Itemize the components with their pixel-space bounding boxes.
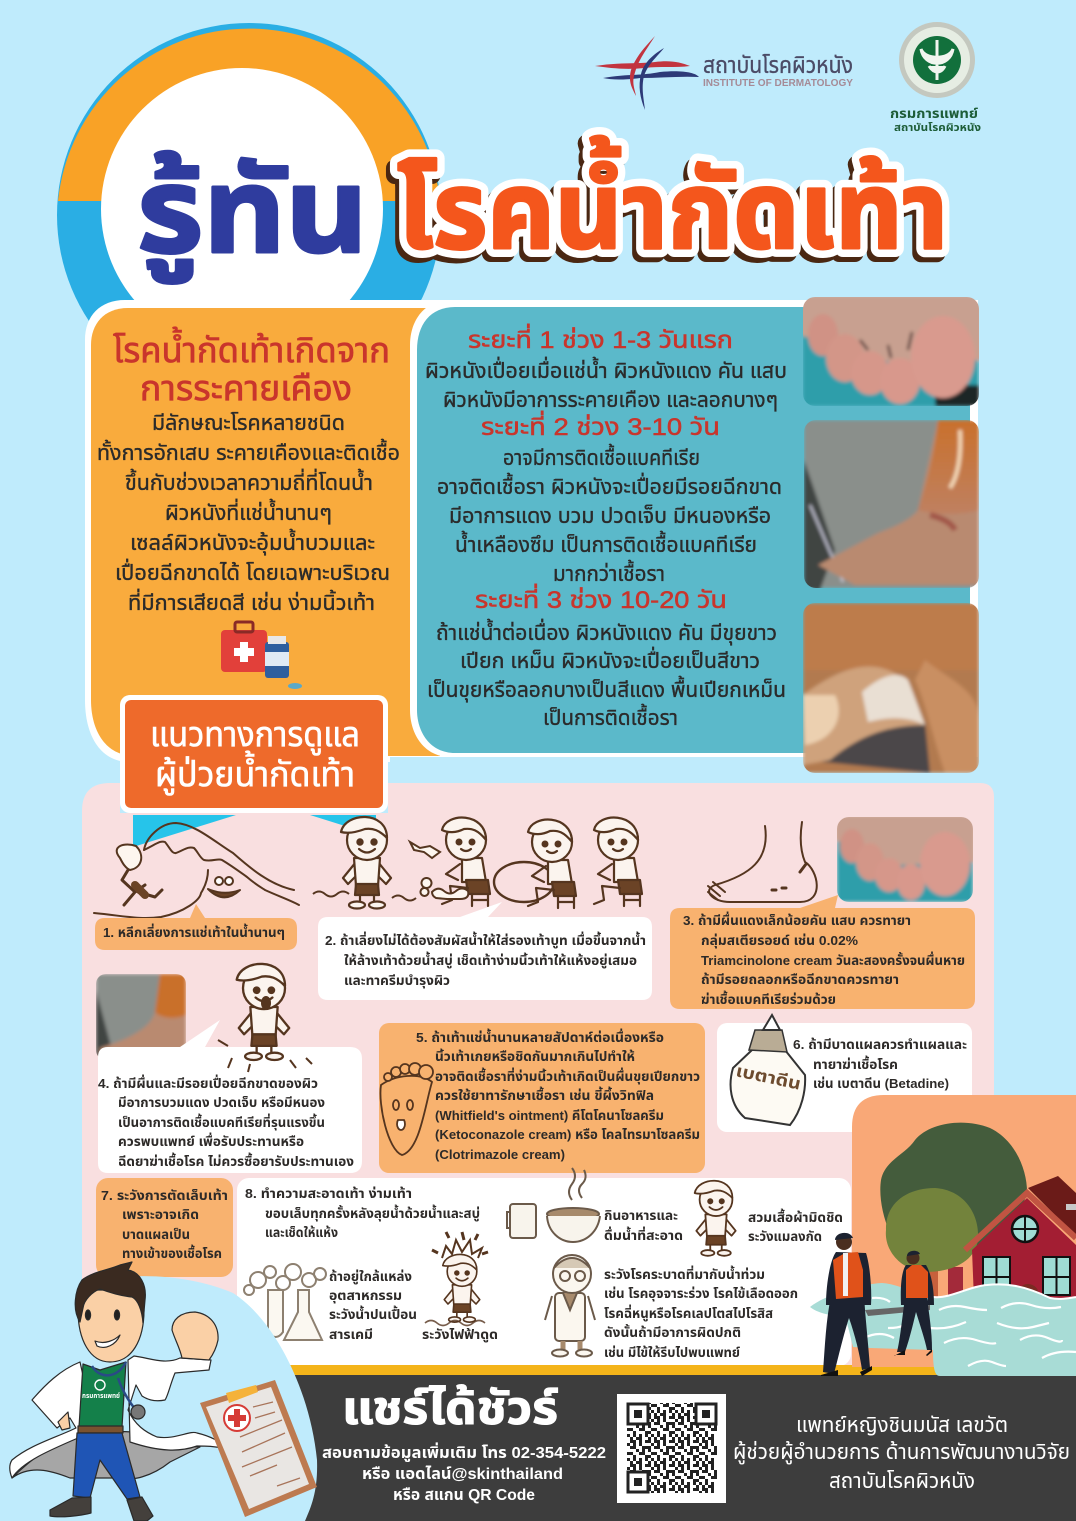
callout 8: 8. ทำความสะอาดเท้า ง่ามเท้า xyxy=(245,1186,412,1201)
icon: betadine bottle xyxy=(731,1015,805,1125)
causes body text: เปื่อยฉีกขาดได้ โดยเฉพาะบริเวณ xyxy=(115,558,390,585)
causes heading xyxy=(113,326,390,408)
callout 4: เป็นอาการติดเชื้อแบคทีเรียที่รุนแรงขึ้น xyxy=(118,1113,325,1130)
callout 4: มีอาการบวมแดง ปวดเจ็บ หรือมีหนอง xyxy=(118,1095,325,1110)
mascot shoes xyxy=(50,1497,153,1521)
stage 3 text: ถ้าแช่น้ำต่อเนื่อง ผิวหนังแดง คัน มีขุยขาว xyxy=(436,618,777,646)
footer credit text: สถาบันโรคผิวหนัง xyxy=(829,1470,975,1493)
callout 8: ขอบเล็บทุกครั้งหลังลุยน้ำด้วยน้ำและสบู่ xyxy=(265,1204,480,1222)
illustration: electric shock child xyxy=(425,1232,488,1326)
callout 3: ถ้ามีรอยถลอกหรือฉีกขาดควรทายา xyxy=(701,972,899,987)
stage 3 text: ระยะที่ 3 ช่วง 10-20 วัน xyxy=(475,583,727,614)
footer credit text: ผู้ช่วยผู้อำนวยการ ด้านการพัฒนางานวิจัย xyxy=(733,1440,1070,1465)
callout 8: ระวังน้ำปนเปื้อน xyxy=(329,1305,417,1322)
illustration: chemical flasks xyxy=(244,1264,326,1340)
callout 8: โรคฉี่หนูหรือโรคเลปโตสไปโรสิส xyxy=(604,1304,773,1322)
photo: infected foot xyxy=(96,974,186,1060)
illustration: glass and bowl xyxy=(507,1168,600,1242)
footer credit text xyxy=(733,1414,1070,1493)
causes heading: โรคน้ำกัดเท้าเกิดจาก xyxy=(113,326,390,370)
callout 3: 3. ถ้ามีผื่นแดงเล็กน้อยคัน แสบ ควรทายา xyxy=(683,911,911,928)
water ripples xyxy=(864,1298,1076,1366)
callout 5: 5. ถ้าเท้าแช่น้ำนานหลายสัปดาห์ต่อเนื่องหรือ xyxy=(416,1028,664,1045)
qr code xyxy=(617,1394,726,1503)
causes body text xyxy=(97,412,400,615)
causes body text: เซลล์ผิวหนังจะอุ้มน้ำบวมและ xyxy=(130,528,375,556)
photo: toes xyxy=(835,815,975,902)
stethoscope xyxy=(92,1362,135,1409)
callout 1 xyxy=(95,904,297,950)
button: care guidance xyxy=(120,695,388,813)
button: care guidance: แนวทางการดูแล xyxy=(150,715,360,755)
stage 3 text: เปียก เหม็น ผิวหนังจะเปื่อยเป็นสีขาว xyxy=(460,646,760,673)
callout 6: เช่น เบตาดีน (Betadine) xyxy=(813,1076,949,1091)
illustration: doctor figure xyxy=(545,1255,595,1356)
causes heading: การระคายเคือง xyxy=(140,369,352,408)
callout 8: เช่น มีไข้ให้รีบไปพบแพทย์ xyxy=(604,1345,740,1360)
footer contact text: หรือ สแกน QR Code xyxy=(393,1487,535,1504)
causes body text: มีลักษณะโรคหลายชนิด xyxy=(152,412,345,435)
causes body text: ขึ้นกับช่วงเวลาความถี่ที่โดนน้ำ xyxy=(125,468,373,495)
stage 1 text xyxy=(425,323,787,412)
callout 6: ทายาฆ่าเชื้อโรค xyxy=(813,1055,898,1072)
callout 8: ระวังแมลงกัด xyxy=(748,1229,822,1244)
illustration: doctor mascot xyxy=(10,1262,227,1521)
callout 8: และเช็ดให้แห้ง xyxy=(265,1225,338,1240)
illustration: crying child xyxy=(218,964,312,1072)
callout 7 xyxy=(96,1178,233,1277)
callout 5: นิ้วเท้าเกยหรือชิดกันมากเกินไปทำให้ xyxy=(435,1048,635,1064)
stage 2 text: น้ำเหลืองซึม เป็นการติดเชื้อแบคทีเรีย xyxy=(455,530,757,557)
callout 2: 2. ถ้าเลี่ยงไม่ได้ต้องสัมผัสน้ำให้ใส่รองเท้าบูท เมื่อขึ้นจากน้ำ xyxy=(325,931,646,949)
icon: betadine bottle: เบตาดีน xyxy=(734,1061,803,1094)
callout 7: บาดแผลเป็น xyxy=(122,1227,190,1242)
callout 2 xyxy=(318,902,652,1000)
callout 2: และทาครีมบำรุงผิว xyxy=(344,973,450,988)
callout 5: (Clotrimazole cream) xyxy=(435,1147,565,1162)
callout 1: 1. หลีกเลี่ยงการแช่เท้าในน้ำนานๆ xyxy=(103,923,285,940)
illustration: flood scene xyxy=(810,1095,1076,1376)
callout 7: ทางเข้าของเชื้อโรค xyxy=(122,1244,222,1261)
stage 2 text: ระยะที่ 2 ช่วง 3-10 วัน xyxy=(481,410,720,441)
footer heading: แชร์ได้ชัวร์ xyxy=(342,1382,559,1434)
callout 8: ระวังโรคระบาดที่มากับน้ำท่วม xyxy=(604,1265,765,1282)
stage 2 text: มีอาการแดง บวม ปวดเจ็บ มีหนองหรือ xyxy=(449,503,771,528)
rescuer 2 xyxy=(865,1251,934,1356)
callout 6 xyxy=(717,1015,972,1132)
callout 8: ดังนั้นถ้ามีอาการผิดปกติ xyxy=(604,1323,741,1340)
mascot coat right and sleeve xyxy=(128,1356,227,1450)
illustration: clipboard xyxy=(200,1380,317,1517)
footer contact text: หรือ แอดไลน์@skinthailand xyxy=(362,1466,563,1483)
mascot hand xyxy=(58,1412,70,1430)
logo: department of medical services xyxy=(890,22,981,134)
callout 8: อุตสาหกรรม xyxy=(329,1288,402,1303)
stage 2 text: อาจติดเชื้อรา ผิวหนังจะเปื่อยมีรอยฉีกขาด xyxy=(437,472,782,499)
stage 1 text: ผิวหนังเปื่อยเมื่อแช่น้ำ ผิวหนังแดง คัน แสบ xyxy=(425,356,787,383)
causes body text: ทั้งการอักเสบ ระคายเคืองและติดเชื้อ xyxy=(97,438,400,465)
callout 8: สวมเสื้อผ้ามิดชิด xyxy=(748,1208,843,1225)
title: โรคน้ำกัดเท้า: โรคน้ำกัดเท้า xyxy=(397,136,948,271)
footer contact text: สอบถามข้อมูลเพิ่มเติม โทร 02-354-5222 xyxy=(322,1442,606,1463)
stage 3 text: เป็นการติดเชื้อรา xyxy=(543,703,678,730)
mascot head xyxy=(78,1290,144,1362)
department name: กรมการแพทย์ xyxy=(890,106,978,121)
callout 4: 4. ถ้ามีผื่นและมีรอยเปื่อยฉีกขาดของผิว xyxy=(98,1074,318,1091)
mascot coat left xyxy=(10,1362,84,1478)
stage 1 text: ผิวหนังมีอาการระคายเคือง และลอกบางๆ xyxy=(443,389,778,412)
callout 8: ดื่มน้ำที่สะอาด xyxy=(604,1226,683,1243)
callout 4 xyxy=(98,1020,362,1173)
stage 1 text: ระยะที่ 1 ช่วง 1-3 วันแรก xyxy=(468,323,733,354)
mascot shirt xyxy=(79,1362,126,1427)
callout 5 xyxy=(379,1023,705,1173)
mascot belt xyxy=(78,1426,123,1433)
callout 5: ควรใช้ยาทารักษาเชื้อรา เช่น ขี้ผึ้งวิทฟิล xyxy=(435,1086,654,1103)
footer credit text: แพทย์หญิงชินมนัส เลขวัต xyxy=(796,1414,1008,1437)
boots xyxy=(410,842,440,896)
logo text Thai: สถาบันโรคผิวหนัง xyxy=(703,52,853,78)
title ring: orange and blue circle xyxy=(57,23,441,407)
callout 7: เพราะอาจเกิด xyxy=(122,1207,199,1222)
callout 5: อาจติดเชื้อราที่ง่ามนิ้วเท้าเกิดเป็นผื่นขุยเปียกขาว xyxy=(435,1067,700,1084)
callout 2: ให้ล้างเท้าด้วยน้ำสบู่ เช็ดเท้าง่ามนิ้วเท้าให้แห้งอยู่เสมอ xyxy=(344,951,637,969)
illustration: wave and running child xyxy=(94,815,376,918)
title: โรคน้ำกัดเท้า: โรคน้ำกัดเท้า xyxy=(397,136,948,271)
icon: first aid kit xyxy=(221,622,302,689)
callout 3 xyxy=(670,895,975,1009)
button: care guidance: ผู้ป่วยน้ำกัดเท้า xyxy=(155,750,355,795)
callout 7: 7. ระวังการตัดเล็บเท้า xyxy=(101,1188,228,1203)
footer band xyxy=(280,1365,1076,1521)
callout 8: ถ้าอยู่ใกล้แหล่ง xyxy=(329,1269,412,1285)
mascot fist xyxy=(172,1312,218,1360)
blue corner behind doctor xyxy=(0,1276,317,1521)
callout 4: ฉีดยาฆ่าเชื้อโรค ไม่ควรซื้อยารับประทานเอง xyxy=(118,1152,354,1169)
illustration: children washing feet xyxy=(313,817,642,908)
photo: foot stage 3 xyxy=(803,603,979,773)
callout 5: (Ketoconazole cream) หรือ โคลไทรมาโซลครีม xyxy=(435,1127,700,1142)
stage 2 text xyxy=(437,410,782,586)
stage 3 text xyxy=(427,583,786,730)
callout 8: กินอาหารและ xyxy=(604,1208,678,1223)
panel: causes xyxy=(85,300,500,762)
stage 2 text: อาจมีการติดเชื้อแบคทีเรีย xyxy=(503,443,700,470)
rescuer 1 xyxy=(821,1233,872,1376)
illustration: child with long sleeves xyxy=(695,1181,736,1256)
logo: institute of dermatology xyxy=(595,36,853,110)
callout 6: 6. ถ้ามีบาดแผลควรทำแผลและ xyxy=(793,1037,967,1052)
photo: foot stage 2 xyxy=(804,420,979,590)
title: รู้ทัน: รู้ทัน xyxy=(137,146,368,283)
causes body text: ที่มีการเสียดสี เช่น ง่ามนิ้วเท้า xyxy=(128,588,375,615)
title: โรคน้ำกัดเท้า: โรคน้ำกัดเท้า xyxy=(393,141,944,276)
department subname: สถาบันโรคผิวหนัง xyxy=(894,122,981,134)
footer contact text xyxy=(322,1442,606,1504)
callout 4: ควรพบแพทย์ เพื่อรับประทานหรือ xyxy=(118,1132,304,1149)
illustration: doctor mascot: กรมการแพทย์ xyxy=(82,1392,120,1400)
callout 3: กลุ่มสเตียรอยด์ เช่น 0.02% xyxy=(701,933,858,948)
photo: toes stage 1 xyxy=(800,295,982,406)
mascot cape xyxy=(12,1430,200,1479)
callout 8: ระวังไฟฟ้าดูด xyxy=(422,1327,498,1343)
panel: stages xyxy=(410,300,978,757)
callout 3: ฆ่าเชื้อแบคทีเรียร่วมด้วย xyxy=(701,990,836,1007)
callout 5: (Whitfield's ointment) คีโตโคนาโซลครีม xyxy=(435,1108,664,1123)
illustration: foot with rash xyxy=(708,822,817,902)
panel: care guidance xyxy=(82,783,994,1370)
icon: foot sole xyxy=(380,1063,433,1155)
causes body text: ผิวหนังที่แช่น้ำนานๆ xyxy=(165,498,332,525)
callout 8 xyxy=(237,1168,851,1366)
mascot trousers xyxy=(73,1433,140,1499)
logo text English: INSTITUTE OF DERMATOLOGY xyxy=(703,77,853,89)
callout 8: สารเคมี xyxy=(329,1327,373,1342)
callout 8: เช่น โรคอุจจาระร่วง โรคไข้เลือดออก xyxy=(604,1286,798,1301)
callout 3: Triamcinolone cream วันละสองครั้งจนผื่นหาย xyxy=(701,951,965,968)
stage 2 text: มากกว่าเชื้อรา xyxy=(553,559,665,586)
flood water xyxy=(810,1283,1076,1376)
stage 3 text: เป็นขุยหรือลอกบางเป็นสีแดง พื้นเปียกเหม็น xyxy=(427,675,786,703)
